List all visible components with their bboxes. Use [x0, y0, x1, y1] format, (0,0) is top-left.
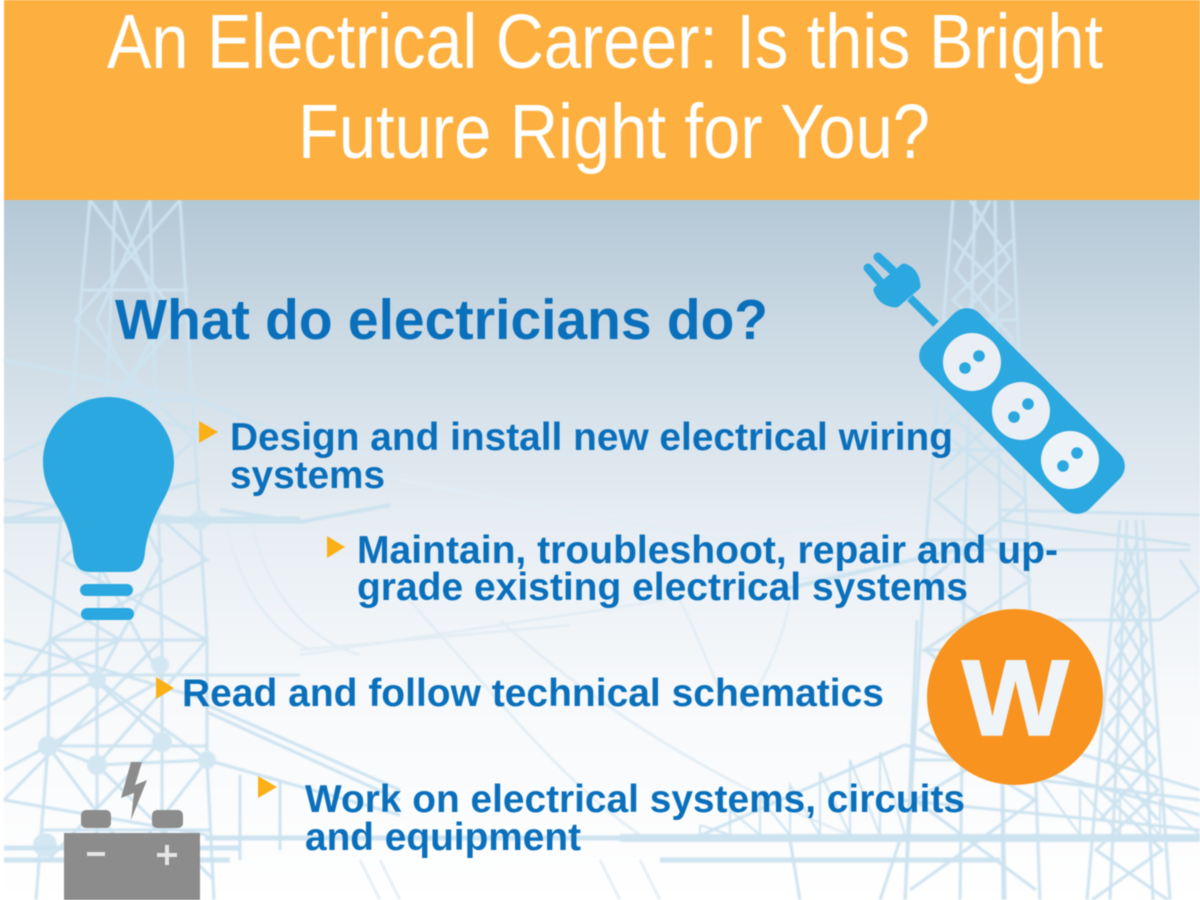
item text [230, 416, 953, 497]
item text: grade existing electrical systems [357, 566, 968, 609]
icon: light bulb [43, 397, 174, 620]
faint wires [225, 480, 960, 900]
icon: power strip with plug [868, 257, 1132, 521]
bullet arrow [156, 677, 174, 699]
item text: systems [230, 454, 385, 497]
section heading: What do electricians do? [115, 288, 768, 352]
left tower nodes [33, 510, 216, 857]
bullet arrow [327, 536, 345, 558]
list item: design and install [199, 416, 953, 497]
icon: battery with lightning bolt [64, 762, 200, 900]
middle tower and truss [690, 620, 1200, 900]
icon: watt symbol: W [962, 637, 1069, 758]
right tower [905, 200, 1040, 900]
item text: Read and follow technical schematics [182, 672, 884, 715]
far right tower [1087, 520, 1170, 900]
item text: and equipment [305, 816, 581, 859]
item text [357, 529, 1058, 609]
left tower [36, 200, 214, 900]
bullet arrow [258, 776, 277, 798]
title: Future Right for You? [298, 89, 930, 175]
header banner [4, 0, 1200, 200]
item text: Work on electrical systems, circuits [305, 778, 965, 821]
item text [305, 778, 965, 859]
list item: work on systems [258, 776, 965, 859]
list item: read schematics [156, 672, 884, 715]
list item: maintain and troubleshoot [327, 529, 1058, 609]
item text: Maintain, troubleshoot, repair and up- [357, 529, 1058, 572]
background: transmission towers [4, 200, 1200, 900]
title [107, 0, 1103, 175]
panel: sky gradient background [4, 200, 1200, 900]
bullet arrow [199, 421, 218, 443]
item text: Design and install new electrical wiring [230, 416, 953, 459]
icon: watt symbol [927, 609, 1103, 785]
